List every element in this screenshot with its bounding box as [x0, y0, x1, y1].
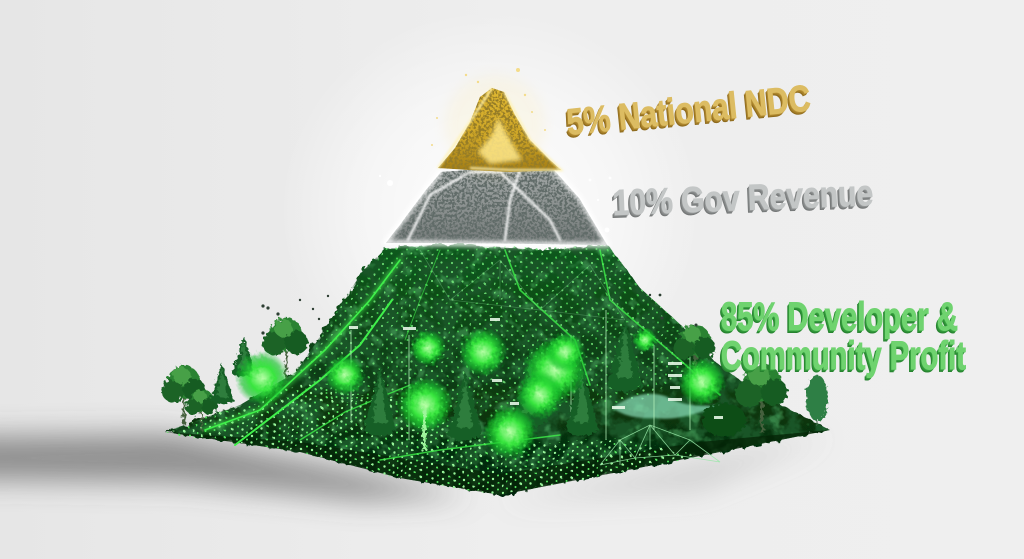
small data labels	[349, 318, 723, 419]
far left trees	[162, 366, 205, 424]
mountain illustration	[0, 68, 830, 519]
label: 5% National NDC: 5% National NDC	[565, 77, 812, 143]
dark inner trees	[364, 366, 396, 436]
gold tier	[431, 68, 564, 175]
glowing ridge lines	[205, 250, 720, 460]
label: 85% Developer & Community Profit: 85% Developer &	[721, 295, 958, 339]
silver tier	[380, 165, 612, 249]
white glow behind mountain	[280, 10, 700, 410]
point cloud dots	[165, 245, 715, 495]
glowing green trees	[235, 328, 726, 459]
floating data specks	[261, 294, 698, 335]
green mountain tier	[160, 240, 840, 500]
data pillars	[351, 310, 690, 440]
dark base wedge	[165, 430, 830, 495]
silver sparkles	[379, 175, 611, 232]
gold speckle	[439, 88, 560, 172]
forest trees	[162, 318, 828, 441]
right side trees	[702, 403, 746, 437]
ground shadow	[0, 434, 830, 500]
small right tree	[806, 375, 828, 426]
label: 85% Developer & Community Profit	[720, 295, 966, 380]
silver speckle	[391, 170, 603, 245]
wireframe mesh	[420, 250, 720, 465]
teal data stream	[612, 394, 722, 419]
white light lines	[385, 170, 608, 245]
dark mottling	[160, 240, 840, 500]
label: 85% Developer & Community Profit: Community Profit	[721, 334, 966, 378]
sparkles	[431, 68, 546, 146]
label: 10% Gov Revenue: 10% Gov Revenue	[612, 172, 874, 223]
gold glow	[478, 118, 522, 164]
